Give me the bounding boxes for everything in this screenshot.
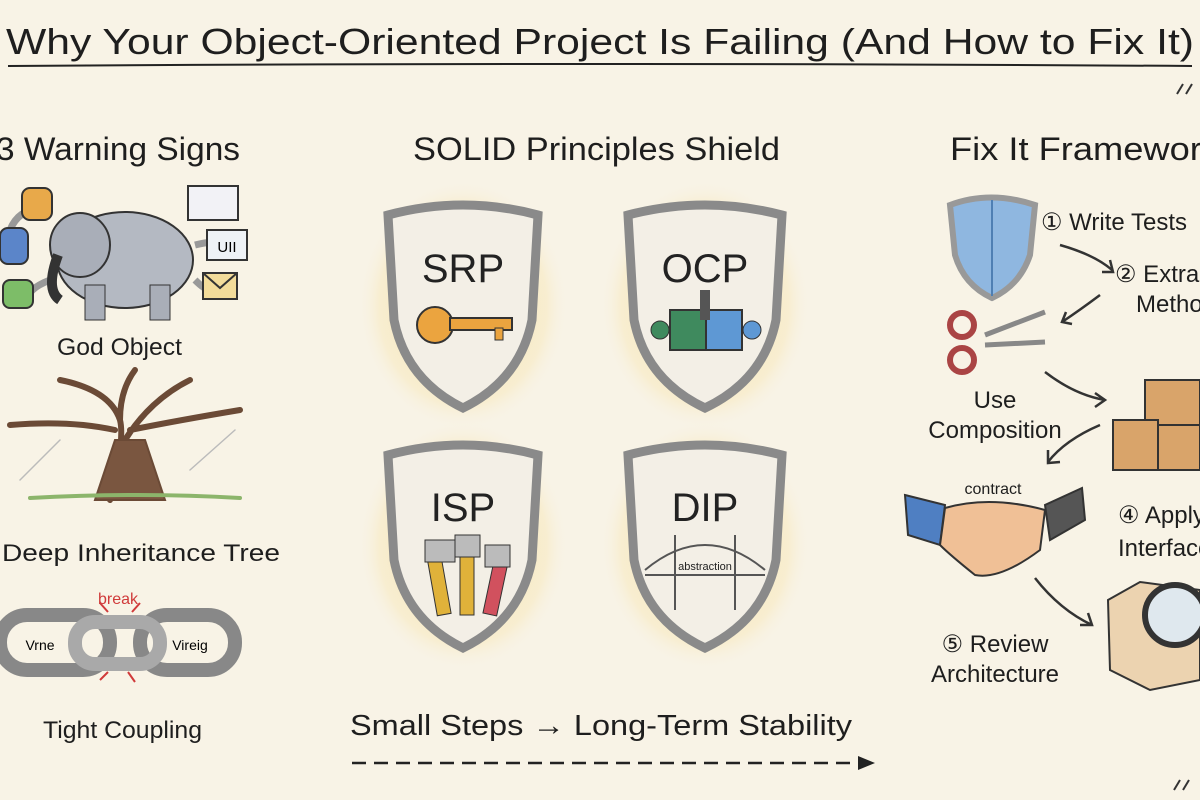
- icon: handshake: [905, 488, 1085, 576]
- icon: chain: [0, 591, 235, 682]
- label: use composition: [928, 387, 1062, 444]
- panel: ISP shield: ISP: [431, 486, 495, 530]
- step 5: [931, 631, 1059, 688]
- arrow 1: [1060, 245, 1113, 272]
- step 1: ① Write Tests: [1041, 209, 1187, 236]
- heading: warning signs: 3 Warning Signs: [0, 131, 240, 167]
- panel: OCP shield: OCP: [662, 247, 748, 291]
- arrow 5: [1035, 578, 1092, 625]
- label: contract: contract: [965, 481, 1022, 498]
- icon: chain: break: [98, 591, 139, 608]
- arrow 3: [1045, 372, 1105, 407]
- text: small steps: Small Steps → Long-Term Stability: [350, 710, 853, 742]
- arrow 2: [1062, 295, 1100, 324]
- icon: cube with magnifier: [1108, 582, 1200, 690]
- panel: DIP shield: [600, 420, 810, 670]
- label: god object: God Object: [57, 334, 182, 361]
- icon: god object elephant: [0, 186, 247, 320]
- icon: scissors: [950, 312, 1045, 372]
- step 4: [1118, 502, 1200, 562]
- icon: puzzle: [651, 290, 761, 350]
- arrow 4: [1048, 425, 1100, 463]
- icon: key: [417, 307, 512, 343]
- panel: ISP shield: [358, 420, 568, 670]
- icon: tree: [10, 370, 240, 500]
- step 2: [1115, 261, 1200, 318]
- panel: DIP shield: DIP: [672, 486, 738, 530]
- heading: SOLID: SOLID Principles Shield: [413, 131, 780, 167]
- label: deep inheritance tree: Deep Inheritance Tree: [2, 540, 280, 567]
- arrow: dashed: [352, 756, 875, 770]
- icon: chain: Vireig: [172, 637, 208, 653]
- step 5: Architecture: [931, 661, 1059, 688]
- step 5: ⑤ Review: [942, 631, 1049, 658]
- icon: blue shield: [950, 198, 1035, 298]
- icon: god object elephant: UII: [217, 239, 237, 256]
- label: use composition: Use: [974, 387, 1016, 414]
- panel: SRP shield: [358, 180, 568, 430]
- icon: wooden blocks: [1113, 380, 1200, 470]
- icon: chain: Vrne: [25, 637, 55, 653]
- icon: bridge: [645, 535, 765, 610]
- icon: wrenches: [425, 535, 510, 616]
- panel: SRP shield: SRP: [422, 247, 504, 291]
- label: tight coupling: Tight Coupling: [43, 717, 202, 744]
- panel: OCP shield: [600, 180, 810, 430]
- label: use composition: Composition: [928, 417, 1062, 444]
- title: Why Your Object-Oriented Project Is Failing (And How to Fix It): [6, 21, 1194, 62]
- icon: bridge: abstraction: [678, 561, 732, 573]
- heading: fix it: Fix It Framework: [950, 131, 1200, 167]
